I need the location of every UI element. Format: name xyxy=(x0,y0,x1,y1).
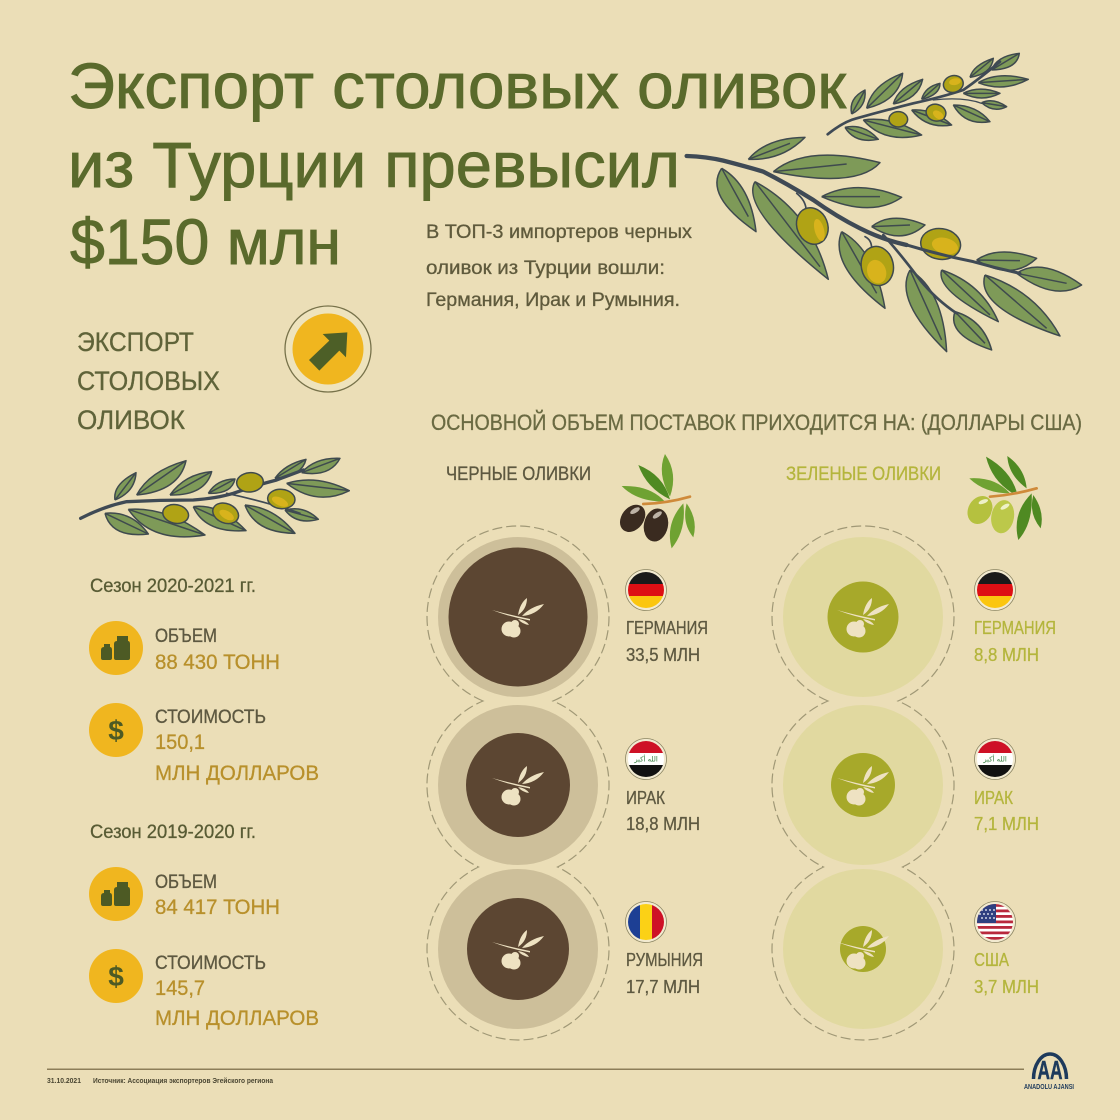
label: Germany green: ГЕРМАНИЯ xyxy=(974,618,1056,638)
value: МЛН ДОЛЛАРОВ xyxy=(155,762,319,785)
season 2020-2021 xyxy=(89,576,319,785)
icon: dollar xyxy=(89,949,143,1003)
icon: dollar xyxy=(89,703,143,757)
dashed outline: black column xyxy=(427,526,609,1040)
label: Germany green xyxy=(974,618,1056,665)
title xyxy=(68,50,847,278)
footer date and source xyxy=(47,1077,273,1085)
label: Germany black xyxy=(626,618,708,665)
flag: Iraq green column xyxy=(974,738,1016,780)
volume: 88 430 ТОНН xyxy=(155,651,280,674)
label: Romania black: РУМЫНИЯ xyxy=(626,950,703,970)
icon: black olives xyxy=(615,454,695,548)
label: USA green xyxy=(974,950,1039,997)
circle: black Romania xyxy=(438,869,598,1029)
volume: 84 417 ТОНН xyxy=(155,896,280,919)
circle: green Iraq xyxy=(783,705,943,865)
footer date and source: Источник: Ассоциация экспортеров Эгейского региона xyxy=(93,1077,273,1085)
season heading: Сезон 2019-2020 гг. xyxy=(90,822,256,843)
flag: Romania xyxy=(626,902,666,942)
export label: ОЛИВОК xyxy=(77,405,185,435)
flag: Iraq xyxy=(626,738,666,780)
illustration: top olive branch xyxy=(828,53,1028,140)
label: USA green: 3,7 МЛН xyxy=(974,977,1039,997)
value: СТОИМОСТЬ xyxy=(155,707,266,728)
intro text: Германия, Ирак и Румыния. xyxy=(426,290,680,311)
label: Germany black: 33,5 МЛН xyxy=(626,645,700,665)
icon: growth arrow xyxy=(285,306,371,392)
logo: Anadolu Ajansi: AA xyxy=(1038,1055,1063,1085)
volume: ОБЪЕМ xyxy=(155,626,217,647)
label: Iraq black: 18,8 МЛН xyxy=(626,814,700,834)
export label: СТОЛОВЫХ xyxy=(77,366,220,396)
footer date and source: 31.10.2021 xyxy=(47,1078,81,1085)
flag: USA xyxy=(974,902,1016,942)
label: Romania black: 17,7 МЛН xyxy=(626,977,700,997)
value: 145,7 xyxy=(155,977,205,1000)
circle: black Germany xyxy=(438,537,598,697)
logo: Anadolu Ajansi xyxy=(1024,1054,1074,1091)
illustration: left olive branch xyxy=(81,458,349,537)
label: Germany green: 8,8 МЛН xyxy=(974,645,1039,665)
value: СТОИМОСТЬ xyxy=(155,953,266,974)
black olives heading: ЧЕРНЫЕ ОЛИВКИ xyxy=(446,464,591,485)
icon: weights xyxy=(89,621,143,675)
volume xyxy=(155,872,280,919)
value: МЛН ДОЛЛАРОВ xyxy=(155,1007,319,1030)
label: Romania black xyxy=(626,950,703,997)
export label xyxy=(77,327,220,435)
volume: ОБЪЕМ xyxy=(155,872,217,893)
intro text: оливок из Турции вошли: xyxy=(426,258,665,279)
volume xyxy=(155,626,280,674)
icon: dollar: $ xyxy=(108,715,124,746)
label: Iraq green: 7,1 МЛН xyxy=(974,814,1039,834)
intro text: В ТОП-3 импортеров черных xyxy=(426,222,693,243)
flag: Germany green column xyxy=(974,570,1016,610)
value xyxy=(155,953,319,1030)
label: Iraq green xyxy=(974,788,1039,834)
value xyxy=(155,707,319,785)
label: Germany black: ГЕРМАНИЯ xyxy=(626,618,708,638)
season 2019-2020 xyxy=(89,822,319,1030)
illustration: large olive branch xyxy=(687,137,1082,352)
title: Экспорт столовых оливок xyxy=(68,50,847,122)
label: USA green: США xyxy=(974,950,1009,970)
logo: Anadolu Ajansi: ANADOLU AJANSI xyxy=(1024,1084,1074,1091)
flag: Iraq: الله أكبر xyxy=(633,754,658,764)
icon: dollar: $ xyxy=(108,961,124,992)
value: 150,1 xyxy=(155,731,205,754)
title: $150 млн xyxy=(70,206,341,278)
green olives heading: ЗЕЛЕНЫЕ ОЛИВКИ xyxy=(786,464,941,485)
label: Iraq black xyxy=(626,788,700,834)
season heading: Сезон 2020-2021 гг. xyxy=(90,576,256,597)
export label: ЭКСПОРТ xyxy=(77,327,194,357)
intro text xyxy=(426,222,693,311)
label: Iraq black: ИРАК xyxy=(626,788,665,808)
circle: green Germany xyxy=(783,537,943,697)
icon: weights xyxy=(89,867,143,921)
circle: black Iraq xyxy=(438,705,598,865)
flag: Iraq green column: الله أكبر xyxy=(982,754,1007,764)
footer line xyxy=(47,1068,1024,1070)
title: из Турции превысил xyxy=(68,129,680,201)
dashed outline: green column xyxy=(772,526,954,1040)
flag: Germany xyxy=(626,570,666,610)
label: Iraq green: ИРАК xyxy=(974,788,1013,808)
circle: green USA xyxy=(783,869,943,1029)
icon: green olives xyxy=(963,456,1042,540)
